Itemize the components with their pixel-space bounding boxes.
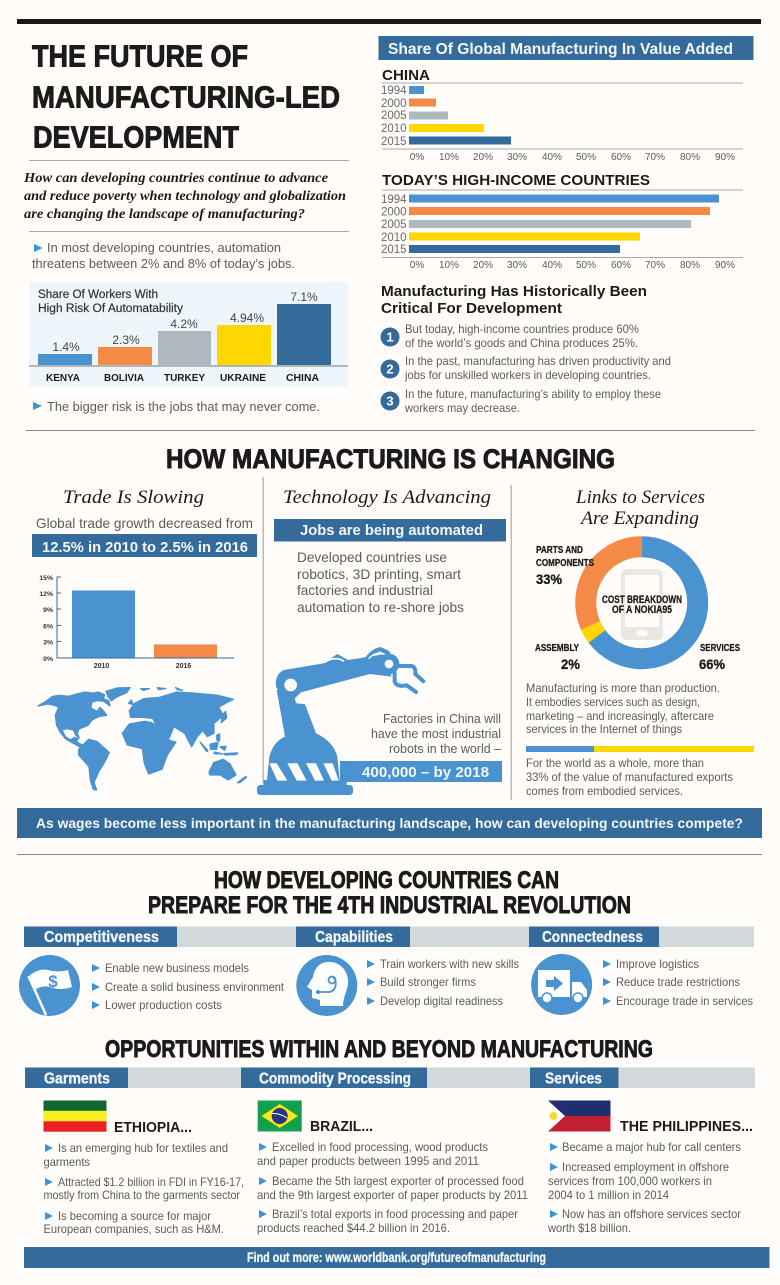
trade bar chart: 6% [43, 624, 53, 630]
panel: connectedness [529, 926, 753, 1015]
bar values: 1.4% [52, 340, 80, 354]
developed countries text: factories and industrial [297, 582, 433, 598]
bullets [603, 957, 753, 1008]
china chart: 1994 [381, 85, 407, 97]
bullets: Became a major hub for call centers [562, 1140, 741, 1154]
robots band: 400,000 – by 2018 [362, 765, 489, 781]
title: DEVELOPMENT [33, 120, 239, 154]
tab: Competitiveness [44, 929, 159, 946]
high-income chart: 1994 [381, 194, 407, 206]
bullets: Now has an offshore services sector [562, 1207, 741, 1221]
automation bullet: In most developing countries, automation [47, 240, 281, 255]
high-income chart: 80% [680, 260, 700, 271]
embodied services text: comes from embodied services. [526, 784, 683, 798]
label: parts and components: COMPONENTS [536, 557, 594, 569]
bullets: Brazil’s total exports in food processing and paper [272, 1207, 518, 1221]
section heading: 4th industrial revolution [148, 867, 631, 919]
bullets: Train workers with new skills [380, 957, 519, 971]
bar values: 7.1% [290, 290, 318, 304]
china chart: 60% [611, 152, 631, 163]
bullets: European companies, such as H&M. [44, 1222, 224, 1236]
intro question: and reduce poverty when technology and globalization [24, 189, 346, 204]
footer band [24, 1247, 770, 1268]
high-income chart: 2010 [381, 232, 407, 244]
country labels: BOLIVIA [104, 372, 144, 384]
services text [526, 681, 720, 736]
china chart: 80% [680, 152, 700, 163]
china chart: 20% [473, 152, 493, 163]
icon: philippines flag [548, 1100, 610, 1132]
china chart: CHINA [382, 67, 430, 84]
intro question [23, 171, 346, 222]
embodied services text [526, 756, 733, 798]
tab: Commodity Processing [259, 1070, 411, 1088]
factories text [371, 712, 501, 756]
bullets [257, 1140, 528, 1235]
china chart: 2005 [381, 110, 407, 122]
services text: It embodies services such as design, [526, 695, 700, 709]
china chart: 90% [715, 152, 735, 163]
point 2: jobs for unskilled workers in developing countries. [404, 368, 651, 382]
country labels: UKRAINE [220, 372, 266, 384]
column heading [575, 487, 705, 529]
china chart: 2000 [381, 98, 407, 110]
point 1 [380, 322, 639, 350]
panel: technology is advancing [257, 487, 506, 795]
country labels [46, 372, 319, 384]
high-income chart: 40% [542, 260, 562, 271]
high-income chart [381, 172, 743, 271]
bullets: Excelled in food processing, wood products [272, 1140, 488, 1154]
bullets: Lower production costs [105, 998, 222, 1012]
bullets: Improve logistics [616, 957, 699, 971]
china chart: 2015 [381, 136, 407, 148]
bar values: 4.94% [230, 311, 264, 325]
china chart: 40% [542, 152, 562, 163]
bigger risk bullet: The bigger risk is the jobs that may never come. [47, 399, 320, 414]
services text: marketing – and increasingly, aftercare [526, 709, 714, 723]
footer band: Find out more: www.worldbank.org/futureofmanufacturing [247, 1250, 546, 1265]
label: parts and components: 33% [536, 571, 563, 587]
trade bar chart: 15% [39, 575, 53, 582]
developed countries text: automation to re-shore jobs [297, 599, 464, 615]
icon: dollar flag [19, 955, 80, 1016]
high-income chart: 2015 [381, 244, 407, 256]
panel: trade is slowing [32, 487, 257, 790]
bullets: and paper products between 1995 and 2011 [257, 1154, 479, 1168]
panel: historically critical [380, 284, 671, 415]
panel: garments / ethiopia [25, 1068, 244, 1236]
icon: dollar flag: $ [48, 972, 58, 991]
trade bar chart [39, 575, 234, 670]
point 1: 1 [386, 330, 394, 344]
developed countries text: Developed countries use [297, 549, 447, 565]
robots band [340, 761, 502, 782]
column heading: Technology Is Advancing [283, 487, 491, 508]
bullets: Is an emerging hub for textiles and [58, 1141, 228, 1155]
donut chart [563, 524, 720, 681]
section heading: 4th industrial revolution: PREPARE FOR THE 4TH INDUSTRIAL REVOLUTION [148, 892, 631, 919]
title: THE FUTURE OF [32, 38, 248, 74]
point 1: of the world’s goods and China produces 25%. [405, 336, 638, 350]
bullets [44, 1141, 244, 1236]
automation bullet: threatens between 2% and 8% of today’s jobs. [32, 256, 295, 271]
panel: competitiveness [19, 926, 285, 1016]
callout: wages question [17, 808, 762, 838]
tab: Capabilities [315, 929, 393, 946]
panel: commodity processing / brazil [241, 1068, 528, 1235]
column heading: Are Expanding [579, 508, 699, 529]
heading: Manufacturing Has Historically Been [381, 284, 647, 300]
country labels: TURKEY [164, 372, 205, 384]
trade bar chart: 0% [43, 656, 53, 663]
chart title [38, 289, 183, 315]
bullets: and the 9th largest exporter of paper products by 2011 [257, 1188, 528, 1202]
panel: share of global manufacturing [378, 36, 754, 271]
high-income chart: 90% [715, 260, 735, 271]
title: MANUFACTURING-LED [32, 80, 340, 114]
tab [25, 1068, 128, 1088]
trade bar chart: 3% [43, 640, 53, 646]
point 3: workers may decrease. [404, 401, 520, 415]
label: assembly [535, 642, 581, 672]
column heading: Trade Is Slowing [63, 487, 204, 508]
donut center label: COST BREAKDOWN [602, 594, 682, 606]
donut center label: OF A NOKIA95 [612, 604, 672, 616]
bullets: Increased employment in offshore [562, 1160, 729, 1174]
trade text: Global trade growth decreased from [36, 515, 253, 531]
icon: world map [38, 688, 246, 790]
china chart: 70% [645, 152, 665, 163]
bullets: Develop digital readiness [380, 994, 503, 1008]
icon: phone [621, 569, 663, 640]
developed countries text [297, 549, 464, 615]
jobs band [274, 519, 506, 542]
chart title: High Risk Of Automatability [38, 303, 183, 315]
label: services: 66% [699, 656, 726, 672]
intro question: How can developing countries continue to advance [23, 171, 328, 186]
china chart: 2010 [381, 123, 407, 135]
bars [38, 304, 331, 366]
header band [378, 36, 754, 60]
bullets: Attracted $1.2 billion in FDI in FY16-17, [58, 1175, 244, 1189]
bullets: worth $18 billion. [547, 1221, 631, 1235]
bullets: Became the 5th largest exporter of processed food [272, 1174, 524, 1188]
china chart: 0% [410, 152, 424, 163]
high-income chart: 10% [439, 260, 459, 271]
bullets: services from 100,000 workers in [548, 1174, 712, 1188]
country name: THE PHILIPPINES... [620, 1119, 753, 1135]
embodied services text: For the world as a whole, more than [526, 756, 704, 770]
share bar [526, 746, 754, 752]
trade bar chart: 2010 [94, 663, 109, 670]
country name: BRAZIL... [310, 1119, 373, 1135]
trade bar chart: 12% [39, 591, 53, 598]
high-income chart: TODAY’S HIGH-INCOME COUNTRIES [382, 172, 650, 189]
trade band: 12.5% in 2010 to 2.5% in 2016 [42, 539, 248, 556]
high-income chart: 2000 [381, 206, 407, 218]
china chart: 30% [507, 152, 527, 163]
bullets: Enable new business models [105, 961, 249, 975]
china chart: 50% [576, 152, 596, 163]
tab: Services [545, 1070, 602, 1088]
bullets: garments [44, 1155, 90, 1169]
bullets [547, 1140, 741, 1235]
panel: capabilities [296, 926, 519, 1016]
icon: head with headset [296, 955, 357, 1016]
label: parts and components [536, 544, 594, 587]
icon: ethiopia flag [44, 1100, 106, 1132]
jobs band: Jobs are being automated [300, 523, 483, 539]
trade band [32, 534, 257, 557]
bullets: Reduce trade restrictions [616, 975, 740, 989]
point 2: In the past, manufacturing has driven productivity and [405, 354, 671, 368]
point 2 [380, 354, 671, 382]
bullets: 2004 to 1 million in 2014 [548, 1188, 669, 1202]
bullets: Is becoming a source for major [58, 1209, 211, 1223]
services text: services in the Internet of things [526, 722, 682, 736]
panel: services / philippines [530, 1068, 753, 1235]
point 3: In the future, manufacturing’s ability to employ these [405, 387, 661, 401]
high-income chart: 50% [576, 260, 596, 271]
heading: Critical For Development [381, 301, 562, 317]
trade bar chart: 9% [43, 607, 53, 614]
bar values [52, 290, 318, 354]
high-income chart: 20% [473, 260, 493, 271]
tab: Garments [44, 1070, 110, 1088]
china chart: 10% [439, 152, 459, 163]
label: services [699, 642, 740, 672]
icon: delivery truck [531, 954, 592, 1015]
factories text: have the most industrial [371, 727, 501, 741]
tab [530, 1068, 618, 1088]
bullets [367, 957, 519, 1008]
country labels: KENYA [46, 372, 80, 384]
header band: Share Of Global Manufacturing In Value Added [388, 41, 733, 58]
automation bullet [32, 240, 295, 271]
intro question: are changing the landscape of manufacturing? [24, 207, 305, 222]
point 2: 2 [386, 362, 394, 376]
country name: ETHIOPIA... [114, 1120, 192, 1136]
panel: links to services [526, 487, 754, 798]
label: assembly: ASSEMBLY [535, 642, 579, 654]
label: services: SERVICES [700, 642, 740, 654]
bullets: mostly from China to the garments sector [44, 1188, 240, 1202]
high-income chart: 2005 [381, 219, 407, 231]
section heading: opportunities: OPPORTUNITIES WITHIN AND BEYOND MANUFACTURING [105, 1036, 653, 1063]
tab [24, 926, 177, 947]
tab: Connectedness [542, 929, 643, 946]
label: assembly: 2% [561, 656, 581, 672]
column heading: Links to Services [575, 487, 705, 508]
china chart [381, 67, 743, 163]
embodied services text: 33% of the value of manufactured exports [526, 770, 733, 784]
developed countries text: robotics, 3D printing, smart [297, 566, 461, 582]
country labels: CHINA [286, 372, 319, 384]
bar values: 4.2% [170, 317, 198, 331]
section heading: 4th industrial revolution: HOW DEVELOPING COUNTRIES CAN [214, 867, 559, 894]
bullets [92, 961, 285, 1012]
heading [381, 284, 647, 317]
factories text: Factories in China will [383, 712, 501, 726]
bullets: Create a solid business environment [105, 980, 285, 994]
bullets: Encourage trade in services [616, 994, 753, 1008]
panel: automatability bar chart [29, 282, 348, 387]
services text: Manufacturing is more than production. [526, 681, 720, 695]
point 3: 3 [386, 394, 394, 408]
high-income chart: 60% [611, 260, 631, 271]
chart title: Share Of Workers With [38, 289, 158, 301]
section heading: how manufacturing is changing: HOW MANUFACTURING IS CHANGING [166, 444, 615, 474]
icon: brazil flag [258, 1100, 302, 1132]
callout: wages question: As wages become less important in the manufacturing landscape, how can developing countries compete? [36, 815, 743, 831]
donut center label [602, 594, 682, 616]
trade bar chart: 2016 [176, 663, 191, 670]
point 3 [380, 387, 661, 415]
title [32, 38, 340, 154]
high-income chart: 0% [410, 260, 424, 271]
tab [296, 926, 410, 947]
bar values: 2.3% [112, 333, 140, 347]
high-income chart: 30% [507, 260, 527, 271]
bullets: Build stronger firms [380, 975, 476, 989]
factories text: robots in the world – [389, 742, 501, 756]
point 1: But today, high-income countries produce 60% [405, 322, 639, 336]
label: parts and components: PARTS AND [536, 544, 583, 556]
high-income chart: 70% [645, 260, 665, 271]
icon: robot arm [257, 649, 423, 795]
bullets: products reached $44.2 billion in 2016. [257, 1221, 450, 1235]
